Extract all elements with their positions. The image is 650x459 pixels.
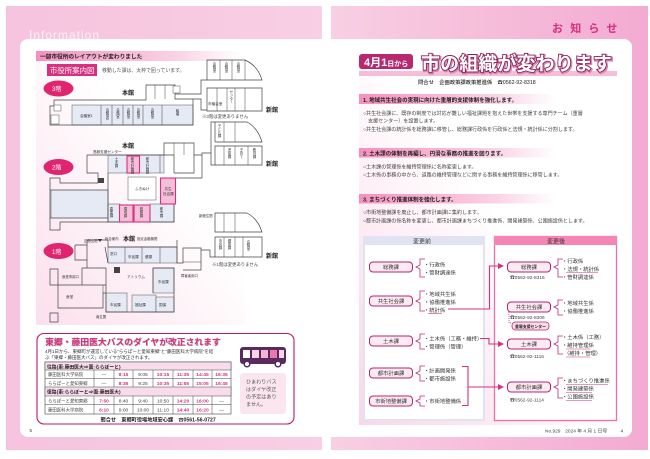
section 2 [359,148,562,178]
group: civil engineering before [370,334,482,350]
heading: organization change: 市の組織が変わります [421,52,612,75]
floor plan: second floor: 農業課 [109,206,113,218]
label: office guide [47,64,97,76]
floor plan: second floor: 都市計画課 [145,156,149,175]
table: bus timetable: 復路(東:ららぽーと⇒面:藤田医大) [47,389,121,396]
group: urban development before: 市街地整備課 [375,397,408,405]
text: bus description [45,348,214,361]
floor plan: second floor: 税務課 [139,206,143,218]
table: bus timetable: 往路(東:藤田医大⇒面:ららぽーと) [47,363,121,370]
table: bus timetable: 10:35 [157,381,170,387]
table: bus timetable: 16:35 [215,372,228,378]
group: city planning after: 都市計画課 [516,383,543,391]
floor plan: first floor: 窓口 [110,251,118,256]
group: urban development before: ・市街地整備係 [424,397,462,405]
text: contact: 問合せ 企画政策課政策推進係 ☎0562-92-8318 [418,78,536,86]
table: bus timetable: 9:00 [119,408,129,414]
text: page number 4: 4 [620,428,624,434]
floor plan: first floor: 指定金融機関 [137,236,158,241]
table: bus timetable: ららぽーと愛知東郷 [48,380,88,387]
section 3 [359,194,588,224]
floor plan: second floor: 子ども課 [217,123,221,138]
table: bus timetable: 14:45 [196,372,209,378]
group: city planning after: ☎0562-92-1114 [510,398,544,404]
table: bus timetable: 10:15 [157,372,170,378]
floor plan: first floor: 会議室 [246,239,250,251]
group: civil engineering before: 土木課 [383,337,400,345]
floor plan: third floor: 会議室 [224,61,228,73]
floor plan: third floor: 会議室2 [105,107,109,120]
table: bus timetable: 藤田医科大学病院 [48,406,84,414]
section 1: ○共生社会課の統計係を総務課に移管し、総務課行政係を行政係と法規・統計係に分割します。 [363,126,578,133]
group: civil engineering after: ☎0562-92-1116 [510,354,544,360]
floor plan: second floor: 都市計画課 [130,156,134,175]
section 1: ○共生社会課に、既存の制度では対応が難しい福祉課題を抱えた世帯を支援する専門チーム（重層 [363,110,583,117]
table: bus timetable: 10:50 [157,398,169,404]
panel: left page background [6,6,322,450]
table: bus timetable: 藤田医科大学病院 [48,371,84,378]
floor plan: first floor: 障害者用口 [181,273,198,278]
group: social before: ・統計係 [424,306,446,314]
group: city planning after [508,376,610,404]
group: social after [508,299,594,330]
group: social after: ☎0562-92-8306 [510,315,545,321]
heading: bus schedule revised: 東郷・藤田医大バスのダイヤが改正されます [45,336,221,347]
group: general affairs after: 総務課 [521,263,538,271]
floor plan: first floor: 食堂 [66,294,74,299]
group: civil engineering after [508,333,604,360]
table: bus timetable: 16:20 [196,408,209,414]
table: bus timetable: ららぽーと愛知東郷 [48,398,88,404]
floor plan: second floor: 土木課 [114,156,118,168]
section 3: ○市街地整備課を廃止し、都市計画課に集約します。 [363,209,482,216]
section 3: ○都市計画課の係名称を変更し、都市計画課まちづくり推進係、開発建築係、公園施設係とします。 [363,218,588,224]
text: bus contact: 問合せ 東郷町役場地域安心課 ☎0561-56-0727 [100,416,216,424]
table: bus timetable: 6:10 [99,408,109,414]
floor plan: second floor: 新館 [266,160,278,168]
floor plan: first floor: ※1階は変更ありません [212,261,259,268]
floor plan: second floor: ふきぬけ [135,186,150,191]
table: bus timetable: 11:35 [177,372,189,378]
floor plan: first floor: 1階 [52,248,61,256]
group: city planning after: ・まちづくり推進係 [562,376,610,384]
floor plan: second floor: 子育て [239,147,243,158]
text: issue footer: No.929 2024 年 4 月 1 日号 [545,428,607,434]
floor plan: first floor: 市民課 [128,254,139,259]
floor plan: first floor: 市民課 [158,279,169,284]
floor plan: first floor: 南玄関 [96,314,107,319]
table: bus timetable: 9:40 [138,398,148,404]
floor plan: first floor: 市民課 [110,302,121,307]
table: bus timetable: 15:05 [196,381,209,387]
group: general affairs after: ・法規・統計係 [562,265,600,273]
floor plan: first floor: アトリウム [127,274,145,279]
floor plan: second floor: 高齢支援センター [93,149,122,154]
text: bus description: 4月1日から、東郷町が運営している“ららぽーと愛知東郷”と“藤田医科大学病院”を結 [45,348,214,355]
table: bus timetable: — [219,400,224,404]
table: bus timetable: 14:40 [177,408,190,414]
floor plan: second floor: 2階 [52,164,61,172]
heading: layout change: 一部市役所のレイアウトが変わりました [40,53,143,61]
floor plan: third floor: 会議室 [115,107,120,119]
table: bus timetable: — [102,382,107,387]
floor plan: third floor: 新館 [266,106,278,114]
group: general affairs after: ・管財調達係 [562,273,594,281]
floor plan: third floor: 会議室 [126,107,130,119]
callout: himawari bus note [240,373,286,414]
panel: after change: 変更後 [547,238,565,246]
floor plan: third floor: 会議室 [136,107,140,119]
group: civil engineering after: 土木課 [521,340,538,348]
floor plan: third floor: 会議室 [236,61,240,73]
group: general affairs after [508,257,600,281]
section 1 [359,94,583,133]
floor plan: first floor: 健康 [145,254,153,259]
heading: notice: お知らせ [552,21,625,35]
group: social after: 重層支援センター [515,324,546,329]
heading: organization change: 市の組織が変わります [422,53,613,76]
group: city planning before: ・都市施設係 [424,374,456,382]
table: bus timetable: — [102,373,107,378]
table: bus timetable: 9:05 [138,372,148,378]
heading: bus schedule revised: 東郷・藤田医大バスのダイヤが改正されます [46,337,222,348]
group: social before: 共生社会課 [378,297,405,305]
floor plan: third floor: 会議室1 [80,113,93,118]
panel: office layout [36,51,278,325]
section 1: 支援センター）を設置します。 [368,118,438,124]
text: moved note: 移動した課は、太枠で囲っています。 [102,67,184,74]
group: city planning after: ・開発建築係 [562,384,594,392]
floor plan: second floor: 教育課 [252,147,256,159]
table: bus timetable: 14:20 [177,398,190,404]
group: civil engineering before: ・土木係（工務・維持） [424,334,482,342]
table: bus timetable: 16:00 [196,398,209,404]
group: general affairs before: ・行政係 [424,260,446,268]
panel: right page background [331,6,648,450]
floor plan: first floor: 国保 [159,302,167,307]
floor plan: third floor: 議場 [175,108,179,116]
floor plan: third floor: センター [229,89,233,104]
section 2: ○土木係の事務の中から、道路の維持管理などに関する事務を維持管理係に移管します。 [363,172,562,178]
group: city planning before: 都市計画課 [378,369,405,377]
panel: before change [363,236,485,420]
table: bus timetable: 11:10 [157,408,169,414]
group: city planning before [370,366,456,382]
text: page number 5: 5 [30,428,32,433]
floor plan: third floor [44,60,278,125]
table: bus timetable: 8:40 [119,398,129,404]
heading: Information: Information [29,28,100,42]
floor plan: third floor: 会議室 [212,61,216,73]
section 3: 3. まちづくり推進体制を強化します。 [363,196,457,204]
floor plan: first floor: 新館 [266,252,278,260]
arrow: statistics to general affairs [448,263,504,309]
group: social after: 共生社会課 [516,303,543,311]
table: bus timetable: 7:50 [99,398,109,404]
floor plan: second floor: 共生 [164,186,172,191]
group: civil engineering after: （維持・管理） [564,349,601,357]
floor plan: second floor: 本館 [122,142,134,150]
section 1: 1. 地域共生社会の実現に向けた重層的支援体制を強化します。 [363,96,517,104]
table: bus timetable: 9:25 [138,381,148,387]
floor plan: third floor: 会議室 [150,107,154,119]
group: urban development before [370,396,462,406]
floor plan: third floor: ※3階は変更ありません [202,113,249,120]
icon: bus [240,347,286,367]
arrow: civil engineering [480,338,504,347]
floor plan: second floor: 社会課 [163,191,174,196]
panel: after change [494,236,617,420]
table: bus timetable: 16:45 [215,381,228,387]
table: bus timetable: 11:55 [177,381,189,387]
group: civil engineering after: ・土木係（工務） [562,333,604,341]
floor plan: first floor: 福祉課 [135,302,146,307]
table: bus timetable [45,362,231,414]
callout: himawari bus note: の予定はあり [246,394,277,400]
floor plan: first floor: 食堂専用口 [62,274,79,279]
floor plan: first floor: 新館玄関 [199,213,213,218]
group: social before [370,290,456,314]
group: general affairs after: ・行政係 [562,257,584,265]
group: city planning before: ・計画開発係 [424,366,456,374]
group: civil engineering after: ・維持管理係 [562,341,594,349]
floor plan: second floor: 都市課 [159,206,163,218]
table: bus timetable: 8:35 [119,381,129,387]
group: social after: ・地域共生係 [562,299,594,307]
floor plan: third floor: 本館 [122,89,134,97]
group: general affairs before: ・管財調達係 [424,268,456,276]
callout: himawari bus note: はダイヤ改正 [246,386,276,393]
section 2: 2. 土木課の体制を再編し、円滑な事務の推進を図ります。 [363,150,506,158]
label: from April 1: 4月1日から [364,56,408,69]
panel: bus schedule [37,334,294,424]
floor plan: second floor [44,122,278,230]
group: city planning after: ・公園施設係 [562,392,594,400]
section 2: ○土木課の管理係を維持管理係に名称変更します。 [363,164,477,170]
floor plan: second floor: 環境課 [123,206,127,218]
floor plan: third floor: 3階 [52,85,61,93]
table: bus timetable: 8:15 [119,372,129,378]
group: social before: ・協働推進係 [424,298,456,306]
floor plan: first floor [44,213,278,322]
floor plan: first floor: 健康課 [227,238,231,250]
floor plan: third floor: 市議会室 [208,101,223,106]
group: general affairs before: 総務課 [383,263,400,271]
group: social before: ・地域共生係 [424,290,456,298]
floor plan: first floor: 総合案内 [105,236,119,241]
group: general affairs after: ☎0562-92-8315 [510,275,545,281]
floor plan: first floor: 本館 [123,235,135,243]
label: office guide: 市役所案内図 [50,66,94,75]
table: bus timetable: 10:00 [137,408,149,414]
text: bus description: ぶ「東郷・藤田医大バス」のダイヤが改正されます。 [45,354,152,361]
arrow: city planning merge [462,366,504,406]
panel: before change: 変更前 [413,238,431,246]
floor plan: second floor: 児童課 [227,147,231,159]
heading: layout change [36,51,240,61]
floor plan: first floor: 正面玄関 [84,238,98,243]
group: social after: ・協働推進係 [562,307,594,315]
callout: himawari bus note: ひまわりバス [246,378,277,386]
panel: organization change [359,52,617,425]
callout: himawari bus note: ません。 [246,402,266,408]
heading: organization change [359,52,617,76]
label: from April 1 [359,54,413,69]
group: general affairs before [370,259,456,277]
floor plan: first floor: 市民課 [218,238,222,250]
group: civil engineering before: ・管理係（管理） [424,342,466,350]
table: bus timetable: — [219,408,224,414]
